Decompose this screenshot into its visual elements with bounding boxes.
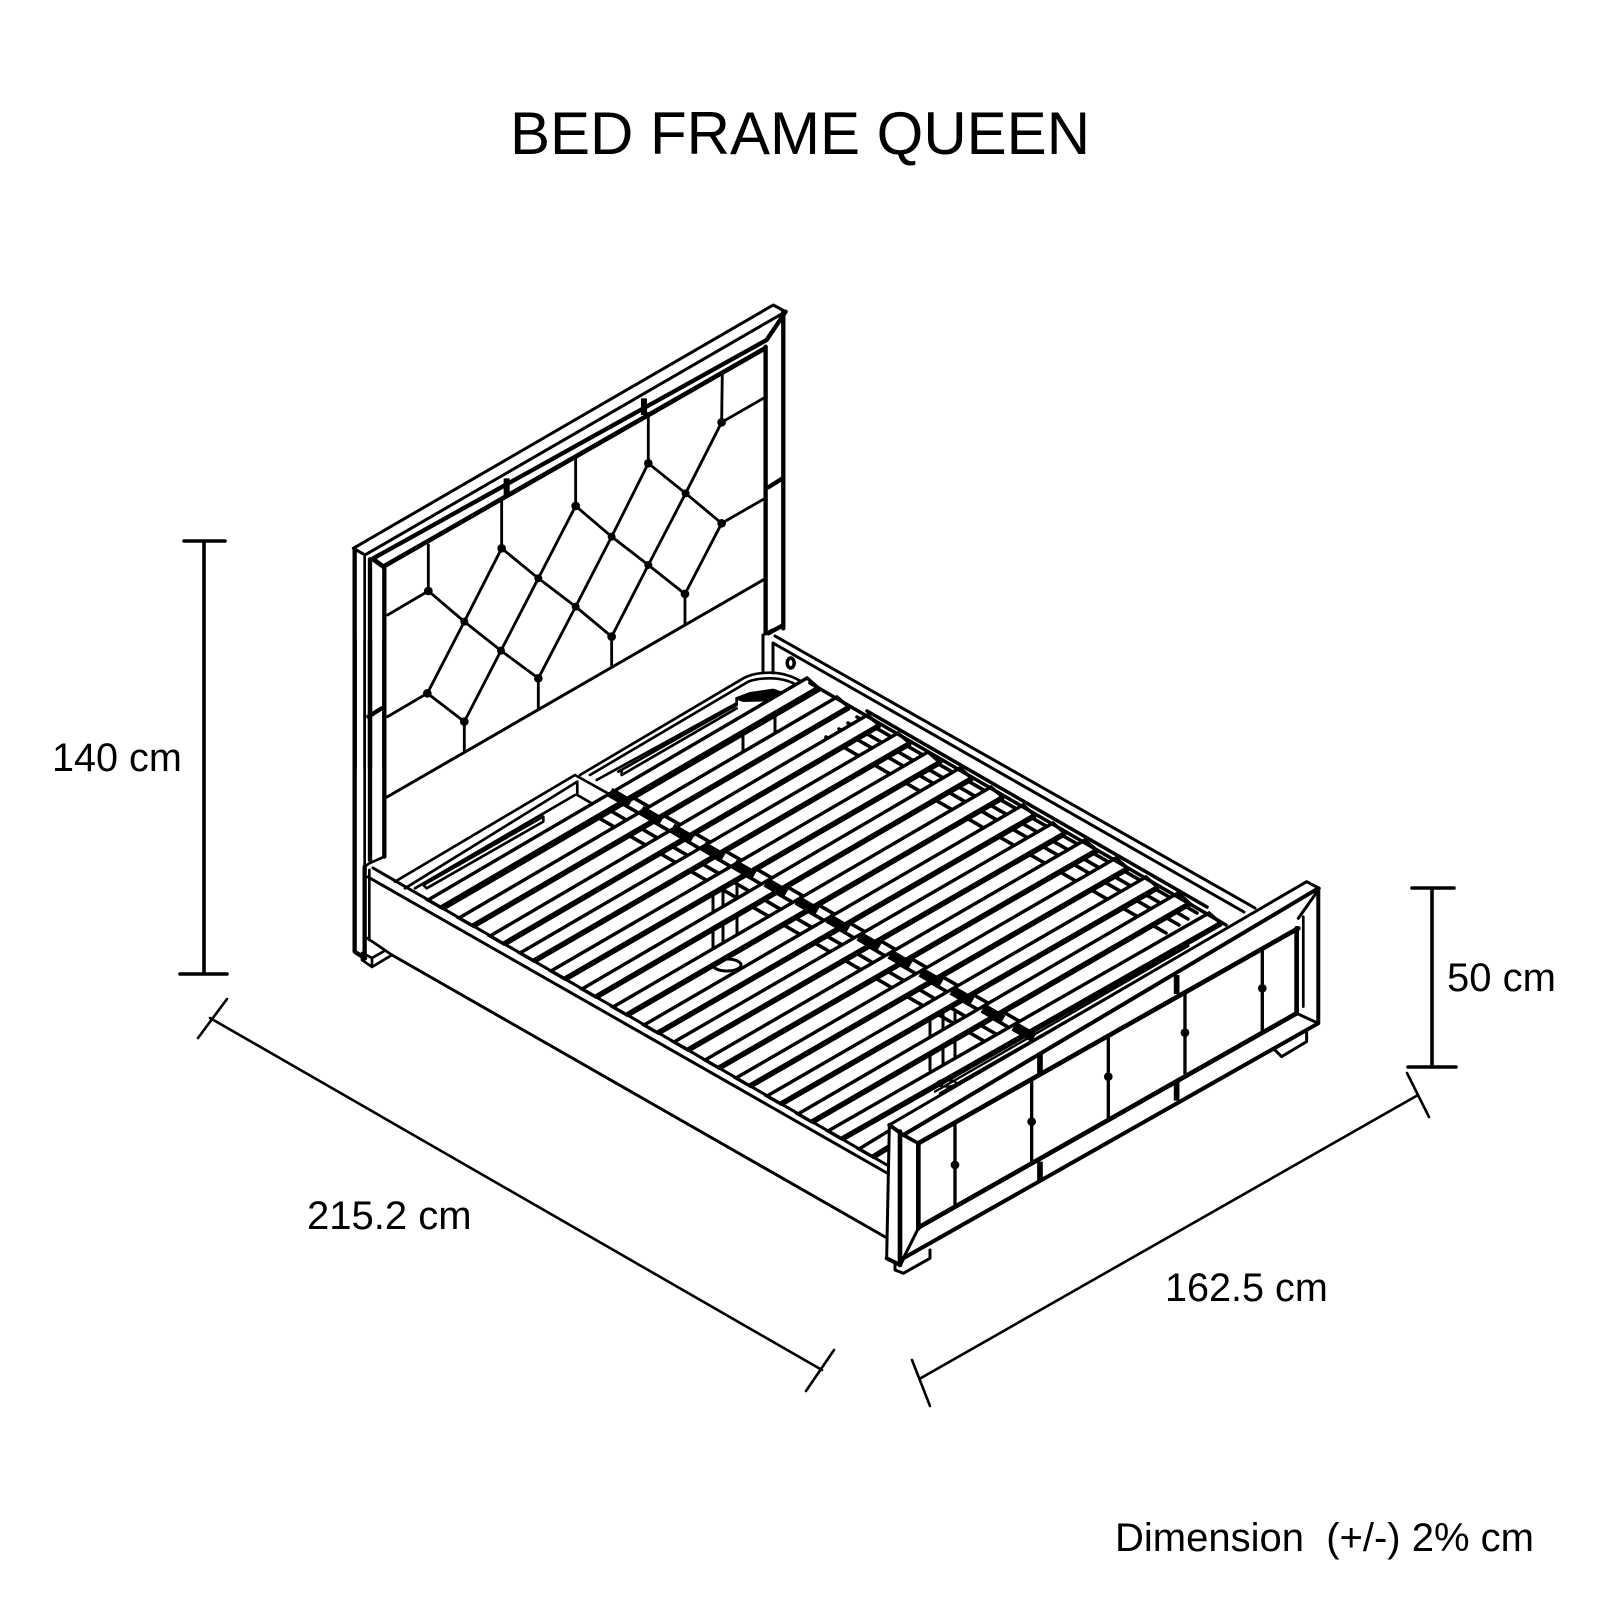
length dimension: 215.2 cm (198, 999, 834, 1391)
width dimension: 162.5 cm (912, 1073, 1429, 1406)
height dimension: 140 cm (52, 541, 227, 974)
headboard (353, 305, 786, 768)
headboard frame (353, 305, 786, 768)
centre spine blocks (610, 792, 1034, 1038)
height dimension: 50 cm: 50 cm (1447, 956, 1556, 1000)
width dimension: 162.5 cm: 162.5 cm (1165, 1266, 1328, 1310)
bed illustration (353, 305, 1319, 1273)
height dimension: 50 cm (1408, 888, 1556, 1067)
headboard lower edge (387, 580, 763, 797)
side rails (368, 630, 1255, 1238)
centre support legs (713, 715, 955, 1070)
head post base and foot (355, 640, 392, 967)
footboard (887, 882, 1319, 1273)
slats (428, 678, 1221, 1157)
height dimension: 140 cm: 140 cm (52, 736, 182, 780)
length dimension: 215.2 cm: 215.2 cm (307, 1194, 472, 1238)
slat tip edge (810, 683, 1226, 925)
cross rails (592, 711, 1207, 1048)
tufted diamond pattern (388, 373, 763, 752)
head plate (395, 673, 802, 888)
title: BED FRAME QUEEN (510, 100, 1090, 167)
foot plate (935, 946, 1191, 1093)
tolerance note: Dimension (+/-) 2% cm (1115, 1516, 1534, 1560)
